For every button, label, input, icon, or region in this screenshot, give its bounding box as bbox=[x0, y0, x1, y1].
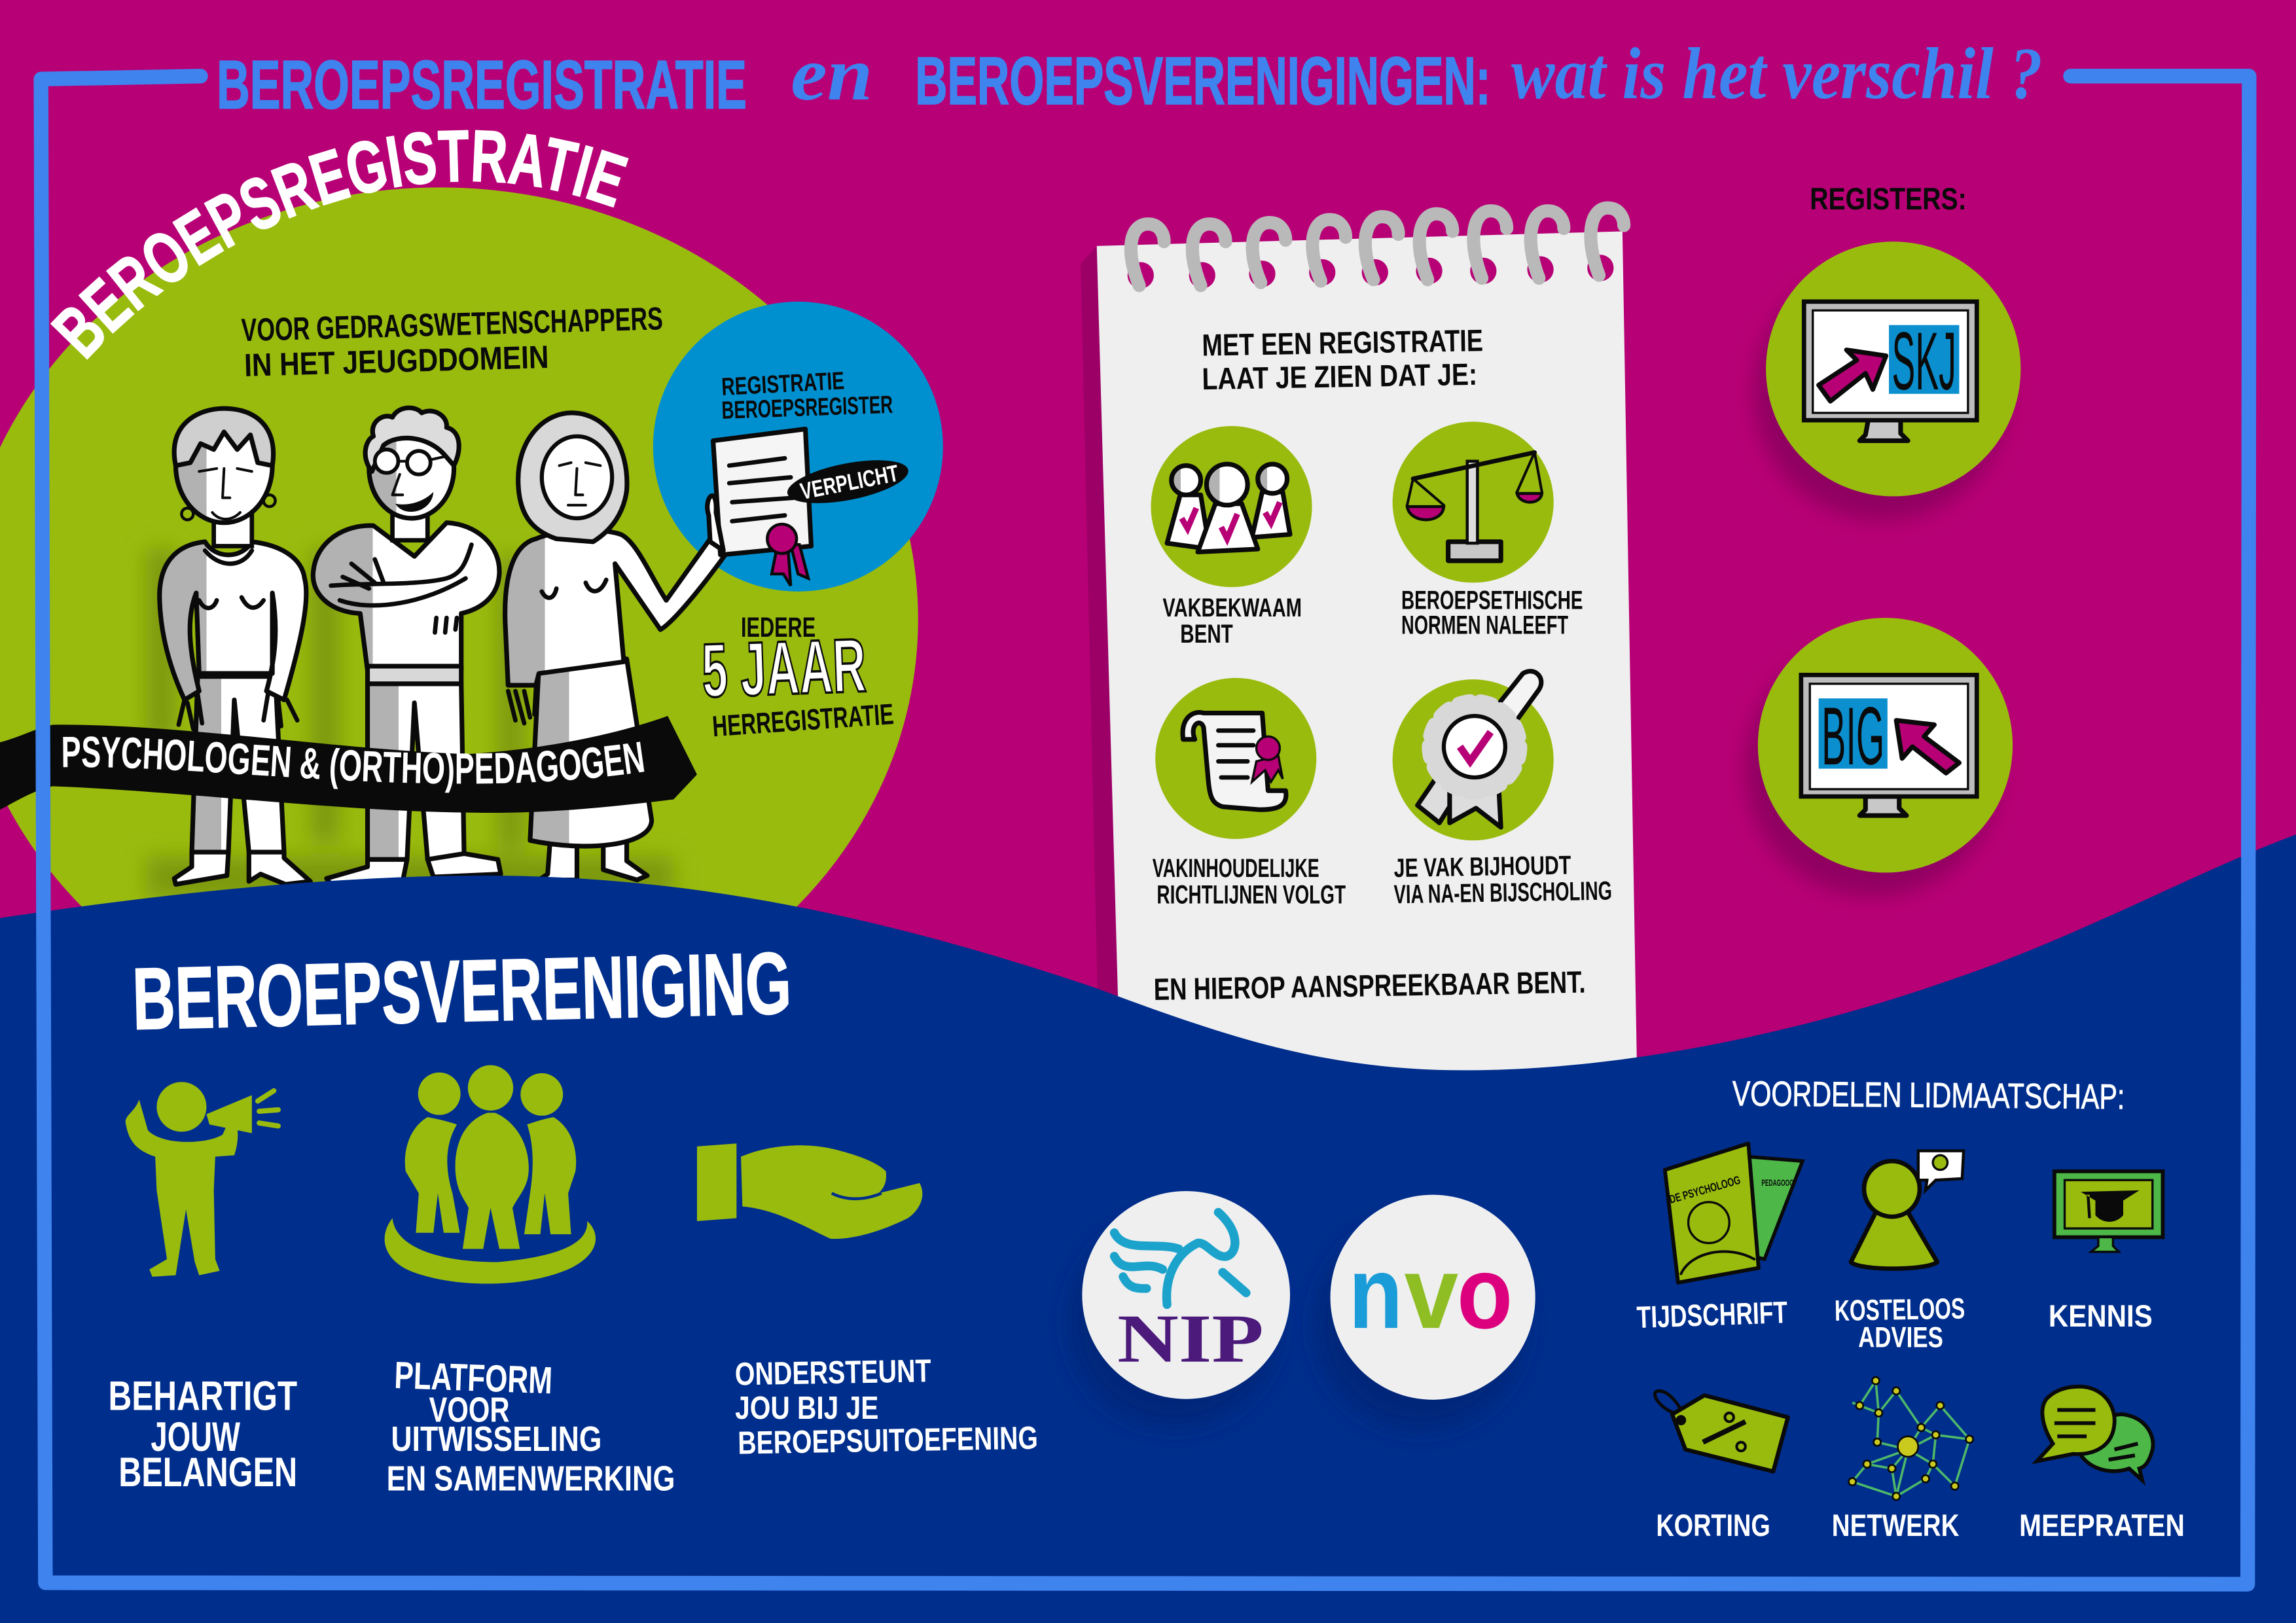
text: behartigt jouw belangen: JOUW bbox=[151, 1414, 241, 1460]
text: beroepsethische normen naleeft: NORMEN NALEEFT bbox=[1401, 611, 1568, 640]
text: beroepsethische normen naleeft bbox=[1401, 586, 1583, 640]
text: je vak bijhoudt via na- en bijscholing bbox=[1393, 850, 1612, 909]
text: iedere 5 jaar herregistratie: IEDERE bbox=[741, 613, 816, 643]
banner: psychologen en (ortho)pedagogen: PSYCHOLOGEN & (ORTHO)PEDAGOGEN bbox=[63, 736, 644, 793]
text: iedere 5 jaar herregistratie bbox=[700, 613, 895, 743]
text: vakbekwaam bent: BENT bbox=[1180, 619, 1233, 649]
icon: group on platform bbox=[385, 1065, 596, 1284]
text: ondersteunt jou bij je beroepsuitoefening: ONDERSTEUNT bbox=[734, 1353, 931, 1392]
icon: kennis monitor bbox=[2054, 1171, 2162, 1252]
text: vakinhoudelijke richtlijnen volgt: RICHTLIJNEN VOLGT bbox=[1157, 880, 1346, 909]
logo: NVO: v bbox=[1405, 1236, 1458, 1350]
notebook spiral rings bbox=[1128, 208, 1624, 289]
title: wat is het verschil ? bbox=[1511, 33, 2043, 115]
text: vakinhoudelijke richtlijnen volgt bbox=[1153, 853, 1346, 909]
text: je vak bijhoudt via na- en bijscholing: JE VAK BIJHOUDT bbox=[1393, 850, 1571, 883]
text: platform voor uitwisseling en samenwerking: VOOR bbox=[429, 1390, 510, 1429]
text: en hierop aanspreekbaar bent: EN HIEROP AANSPREEKBAAR BENT. bbox=[1153, 965, 1586, 1007]
icon: tijdschrift magazines bbox=[1665, 1143, 1803, 1283]
panel: beroepsvereniging blue wave bbox=[0, 834, 2296, 1623]
person: man with glasses and crossed arms bbox=[313, 408, 501, 884]
text: kosteloos advies: ADVIES bbox=[1858, 1321, 1943, 1353]
text: iedere 5 jaar herregistratie: 5 JAAR bbox=[700, 622, 867, 713]
text: behartigt jouw belangen: BEHARTIGT bbox=[109, 1373, 297, 1419]
logo: NIP bbox=[1069, 1191, 1290, 1427]
icon: tijdschrift magazines: PEDAGOOG bbox=[1761, 1178, 1794, 1188]
text: ondersteunt jou bij je beroepsuitoefening: JOU BIJ JE bbox=[735, 1390, 878, 1426]
notebook heading: MET EEN REGISTRATIE bbox=[1202, 323, 1483, 363]
text: korting: KORTING bbox=[1656, 1508, 1770, 1543]
text: platform voor uitwisseling en samenwerking: PLATFORM bbox=[393, 1354, 553, 1402]
title bbox=[217, 32, 2043, 124]
text: behartigt jouw belangen bbox=[109, 1373, 297, 1495]
panel: beroepsregistratie green circle bbox=[0, 187, 918, 1051]
icon: three pawns with check marks bbox=[1151, 426, 1312, 587]
heading: beroepsvereniging: BEROEPSVERENIGING bbox=[132, 934, 793, 1048]
text: meepraten: MEEPRATEN bbox=[2019, 1508, 2185, 1543]
panel: SKJ register: SKJ bbox=[1892, 315, 1956, 407]
text: vakbekwaam bent bbox=[1162, 593, 1302, 649]
text: voordelen lidmaatschap: VOORDELEN LIDMAATSCHAP: bbox=[1732, 1074, 2125, 1116]
label: verplicht pill: VERPLICHT bbox=[798, 460, 901, 505]
icon: tijdschrift magazines: DE PSYCHOLOOG bbox=[1668, 1173, 1742, 1206]
text: behartigt jouw belangen: BELANGEN bbox=[118, 1450, 297, 1495]
text: voor gedragswetenschappers: VOOR GEDRAGSWETENSCHAPPERS bbox=[241, 300, 664, 348]
heading: beroepsregistratie: BEROEPSREGISTRATIE bbox=[50, 130, 628, 360]
icon: kosteloos advies pawn bbox=[1851, 1150, 1964, 1269]
text: platform voor uitwisseling en samenwerking bbox=[387, 1354, 675, 1499]
text: vakinhoudelijke richtlijnen volgt: VAKINHOUDELIJKE bbox=[1153, 853, 1319, 883]
text: iedere 5 jaar herregistratie: HERREGISTRATIE bbox=[711, 698, 895, 743]
panel: blue circle registratie beroepsregister: REGISTRATIE bbox=[721, 367, 845, 401]
logo: NVO: n bbox=[1349, 1236, 1403, 1350]
text: kosteloos advies: KOSTELOOS bbox=[1835, 1293, 1965, 1327]
notebook heading: LAAT JE ZIEN DAT JE: bbox=[1202, 357, 1477, 396]
notebook heading bbox=[1202, 323, 1483, 396]
icon: balance scales bbox=[1393, 421, 1554, 582]
panel: blue circle registratie beroepsregister: BEROEPSREGISTER bbox=[721, 391, 893, 425]
panel: notebook bbox=[1081, 208, 1637, 1076]
text: ondersteunt jou bij je beroepsuitoefening: BEROEPSUITOEFENING bbox=[738, 1420, 1038, 1461]
panel: BIG register bbox=[1746, 618, 2013, 896]
icon: person with megaphone bbox=[126, 1082, 278, 1277]
text: je vak bijhoudt via na- en bijscholing: VIA NA-EN BIJSCHOLING bbox=[1393, 876, 1612, 909]
text: netwerk: NETWERK bbox=[1832, 1508, 1959, 1543]
title: BEROEPSVERENIGINGEN: bbox=[915, 43, 1491, 118]
figure shadows bbox=[147, 549, 673, 897]
text: voor gedragswetenschappers: IN HET JEUGDDOMEIN bbox=[243, 339, 549, 383]
text: registers: REGISTERS: bbox=[1810, 181, 1967, 216]
logo: NVO: o bbox=[1457, 1236, 1513, 1350]
logo: NVO bbox=[1315, 1195, 1535, 1431]
text: kosteloos advies bbox=[1835, 1293, 1965, 1353]
icon: certificate with seal bbox=[708, 429, 811, 586]
logo: NIP: NIP bbox=[1117, 1300, 1264, 1377]
banner: psychologen en (ortho)pedagogen bbox=[0, 716, 697, 813]
person: woman in hijab holding certificate bbox=[505, 413, 726, 880]
text: platform voor uitwisseling en samenwerking: UITWISSELING bbox=[391, 1419, 602, 1459]
icon: rosette with roll bbox=[1393, 671, 1554, 840]
icon: open hand bbox=[697, 1143, 922, 1239]
icon: korting price tag bbox=[1655, 1391, 1788, 1471]
text: ondersteunt jou bij je beroepsuitoefening bbox=[734, 1353, 1038, 1461]
text: tijdschrift: TIJDSCHRIFT bbox=[1636, 1294, 1788, 1334]
icon: scroll with seal bbox=[1155, 678, 1316, 839]
panel: SKJ register bbox=[1754, 241, 2020, 520]
person: woman with earrings bbox=[160, 408, 310, 884]
text: beroepsethische normen naleeft: BEROEPSETHISCHE bbox=[1401, 586, 1583, 615]
text: voor gedragswetenschappers bbox=[241, 300, 664, 383]
title: en bbox=[791, 32, 872, 116]
text: platform voor uitwisseling en samenwerking: EN SAMENWERKING bbox=[387, 1459, 675, 1499]
icon: netwerk bbox=[1849, 1377, 1973, 1500]
text: vakbekwaam bent: VAKBEKWAAM bbox=[1162, 593, 1302, 622]
label: verplicht pill bbox=[784, 452, 912, 511]
text: kennis: KENNIS bbox=[2049, 1298, 2153, 1333]
title: BEROEPSREGISTRATIE bbox=[217, 47, 747, 124]
panel: blue circle registratie beroepsregister bbox=[653, 302, 943, 592]
panel: BIG register: BIG bbox=[1821, 690, 1884, 782]
icon: meepraten speech bubbles bbox=[2037, 1387, 2153, 1480]
